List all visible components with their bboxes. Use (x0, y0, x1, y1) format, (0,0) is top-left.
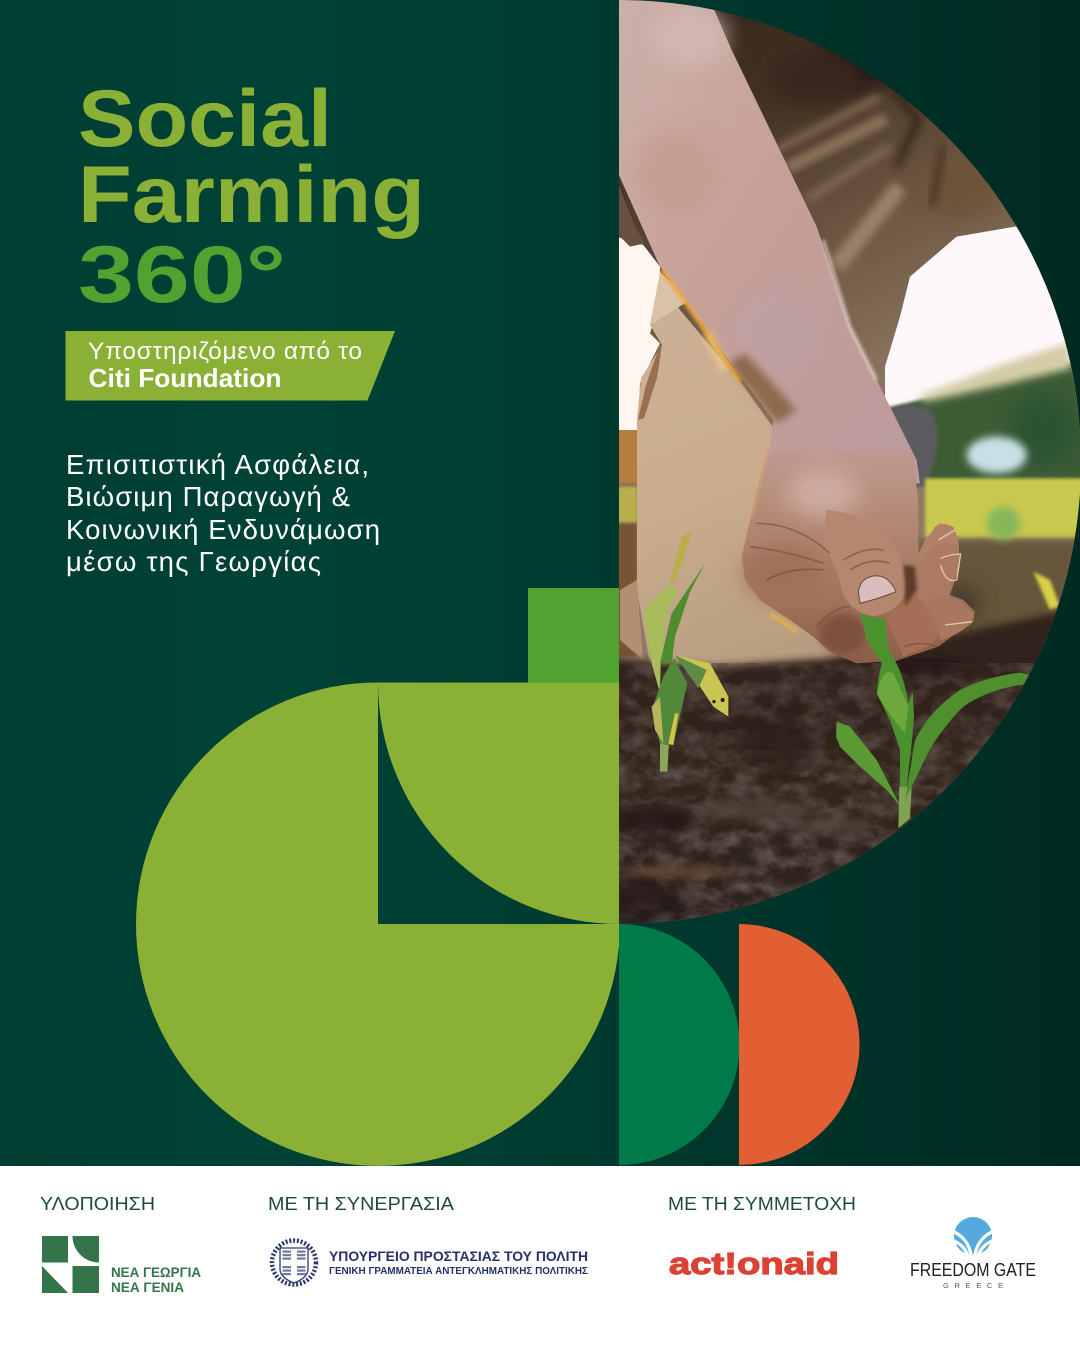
drooping yellow leaf (675, 655, 728, 717)
ministry name: ΥΠΟΥΡΓΕΙΟ ΠΡΟΣΤΑΣΙΑΣ ΤΟΥ ΠΟΛΙΤΗ (329, 1248, 588, 1264)
very dark shirt shadow near the arc (826, 49, 890, 96)
shirt fold highlights (777, 90, 943, 267)
lower leaf (652, 658, 687, 745)
blurred plant at right (1033, 572, 1060, 610)
mid-ground soft soil (918, 540, 1080, 640)
logo: Greek state emblem (272, 1240, 316, 1284)
forearm (617, 0, 920, 483)
left field patches (617, 487, 637, 523)
left warm field patch (619, 430, 637, 484)
left sleeve shadow (619, 186, 645, 247)
large lime shape with cut-out (136, 682, 620, 1166)
title line: Social: Social (78, 74, 332, 164)
heading: cooperation: ΜΕ ΤΗ ΣΥΝΕΡΓΑΣΙΑ (268, 1193, 455, 1214)
subtitle text block: Κοινωνική Ενδυνάμωση (66, 514, 380, 545)
fingernail lines (938, 530, 972, 625)
field of yellow crops (925, 478, 1080, 538)
stem (898, 787, 912, 828)
fingers (887, 524, 973, 657)
right plant leaves (836, 613, 1029, 828)
trousers pocket and creases (620, 272, 690, 660)
logo: Nea Georgia Nea Genia (42, 1236, 201, 1295)
left leaf (836, 722, 901, 807)
banner: supported by Citi Foundation (66, 331, 395, 400)
geometric shapes composition (136, 588, 860, 1166)
title: Social Farming 360° (78, 74, 425, 320)
forearm highlights and shading (637, 7, 823, 423)
subtitle text block (66, 449, 380, 577)
vein highlight (823, 240, 877, 380)
left broad leaf (643, 585, 678, 693)
right leaf (905, 673, 1029, 800)
thumb (823, 510, 906, 616)
footer section: implementation (40, 1193, 201, 1295)
logo: Freedom Gate Greece: GREECE (943, 1281, 1003, 1290)
footer section: cooperation (268, 1193, 588, 1284)
photo: farmer's hand touching a young corn plant, in a semicircle (603, 0, 1080, 937)
stem (660, 743, 669, 772)
backlit golden hairs on the arm (662, 270, 740, 382)
subtitle text block: μέσω της Γεωργίας (66, 546, 321, 577)
logo: Nea Georgia Nea Genia: ΝΕΑ ΓΕΝΙΑ (111, 1279, 184, 1295)
hand silhouette (742, 450, 975, 663)
banner shape (66, 331, 395, 400)
gap shadow between thumb and fingers (903, 565, 917, 607)
footer section: participation (668, 1193, 1036, 1290)
distant treeline (887, 360, 1080, 483)
title line: 360°: 360° (78, 230, 286, 320)
logo: Nea Georgia Nea Genia: ΝΕΑ ΓΕΩΡΓΙΑ (111, 1264, 201, 1280)
left plant leaves (643, 532, 728, 772)
logo: Freedom Gate Greece: FREEDOM GATE (910, 1259, 1036, 1280)
pale blue blob in the distance (967, 437, 1027, 473)
green half circle (619, 924, 740, 1165)
general secretariat name: ΓΕΝΙΚΗ ΓΡΑΜΜΑΤΕΙΑ ΑΝΤΕΓΚΛΗΜΑΤΙΚΗΣ ΠΟΛΙΤΙΚΗΣ (329, 1266, 588, 1277)
subtitle text block: Επισιτιστική Ασφάλεια, (66, 449, 369, 480)
sky on the left (617, 237, 660, 430)
soil bed (619, 606, 1058, 924)
upper thin leaf (669, 532, 692, 583)
footer white panel (0, 1166, 1080, 1350)
narrow upright leaf (660, 563, 705, 663)
subtitle text block: Βιώσιμη Παραγωγή & (66, 481, 350, 512)
sky on the right (885, 217, 1080, 410)
banner text line 2: Citi Foundation (88, 363, 282, 393)
thumbnail (858, 576, 896, 603)
hand creases (750, 523, 937, 647)
main leaf (860, 613, 914, 787)
logo: actionaid: act!onaid (669, 1246, 839, 1281)
orange half circle (739, 924, 860, 1165)
soil clods (603, 658, 970, 917)
golden edge hairs (770, 613, 797, 632)
hand shading (743, 470, 867, 653)
banner text line 1: Υποστηριζόμενο από το (88, 338, 362, 365)
logo: Freedom Gate Greece (910, 1217, 1036, 1290)
grey glove at the belt (890, 405, 938, 487)
heading: participation: ΜΕ ΤΗ ΣΥΜΜΕΤΟΧΗ (668, 1193, 856, 1214)
trousers (637, 307, 843, 669)
title line: Farming: Farming (78, 150, 425, 240)
heading: implementation: ΥΛΟΠΟΙΗΣΗ (40, 1193, 155, 1214)
small green square (528, 588, 620, 682)
